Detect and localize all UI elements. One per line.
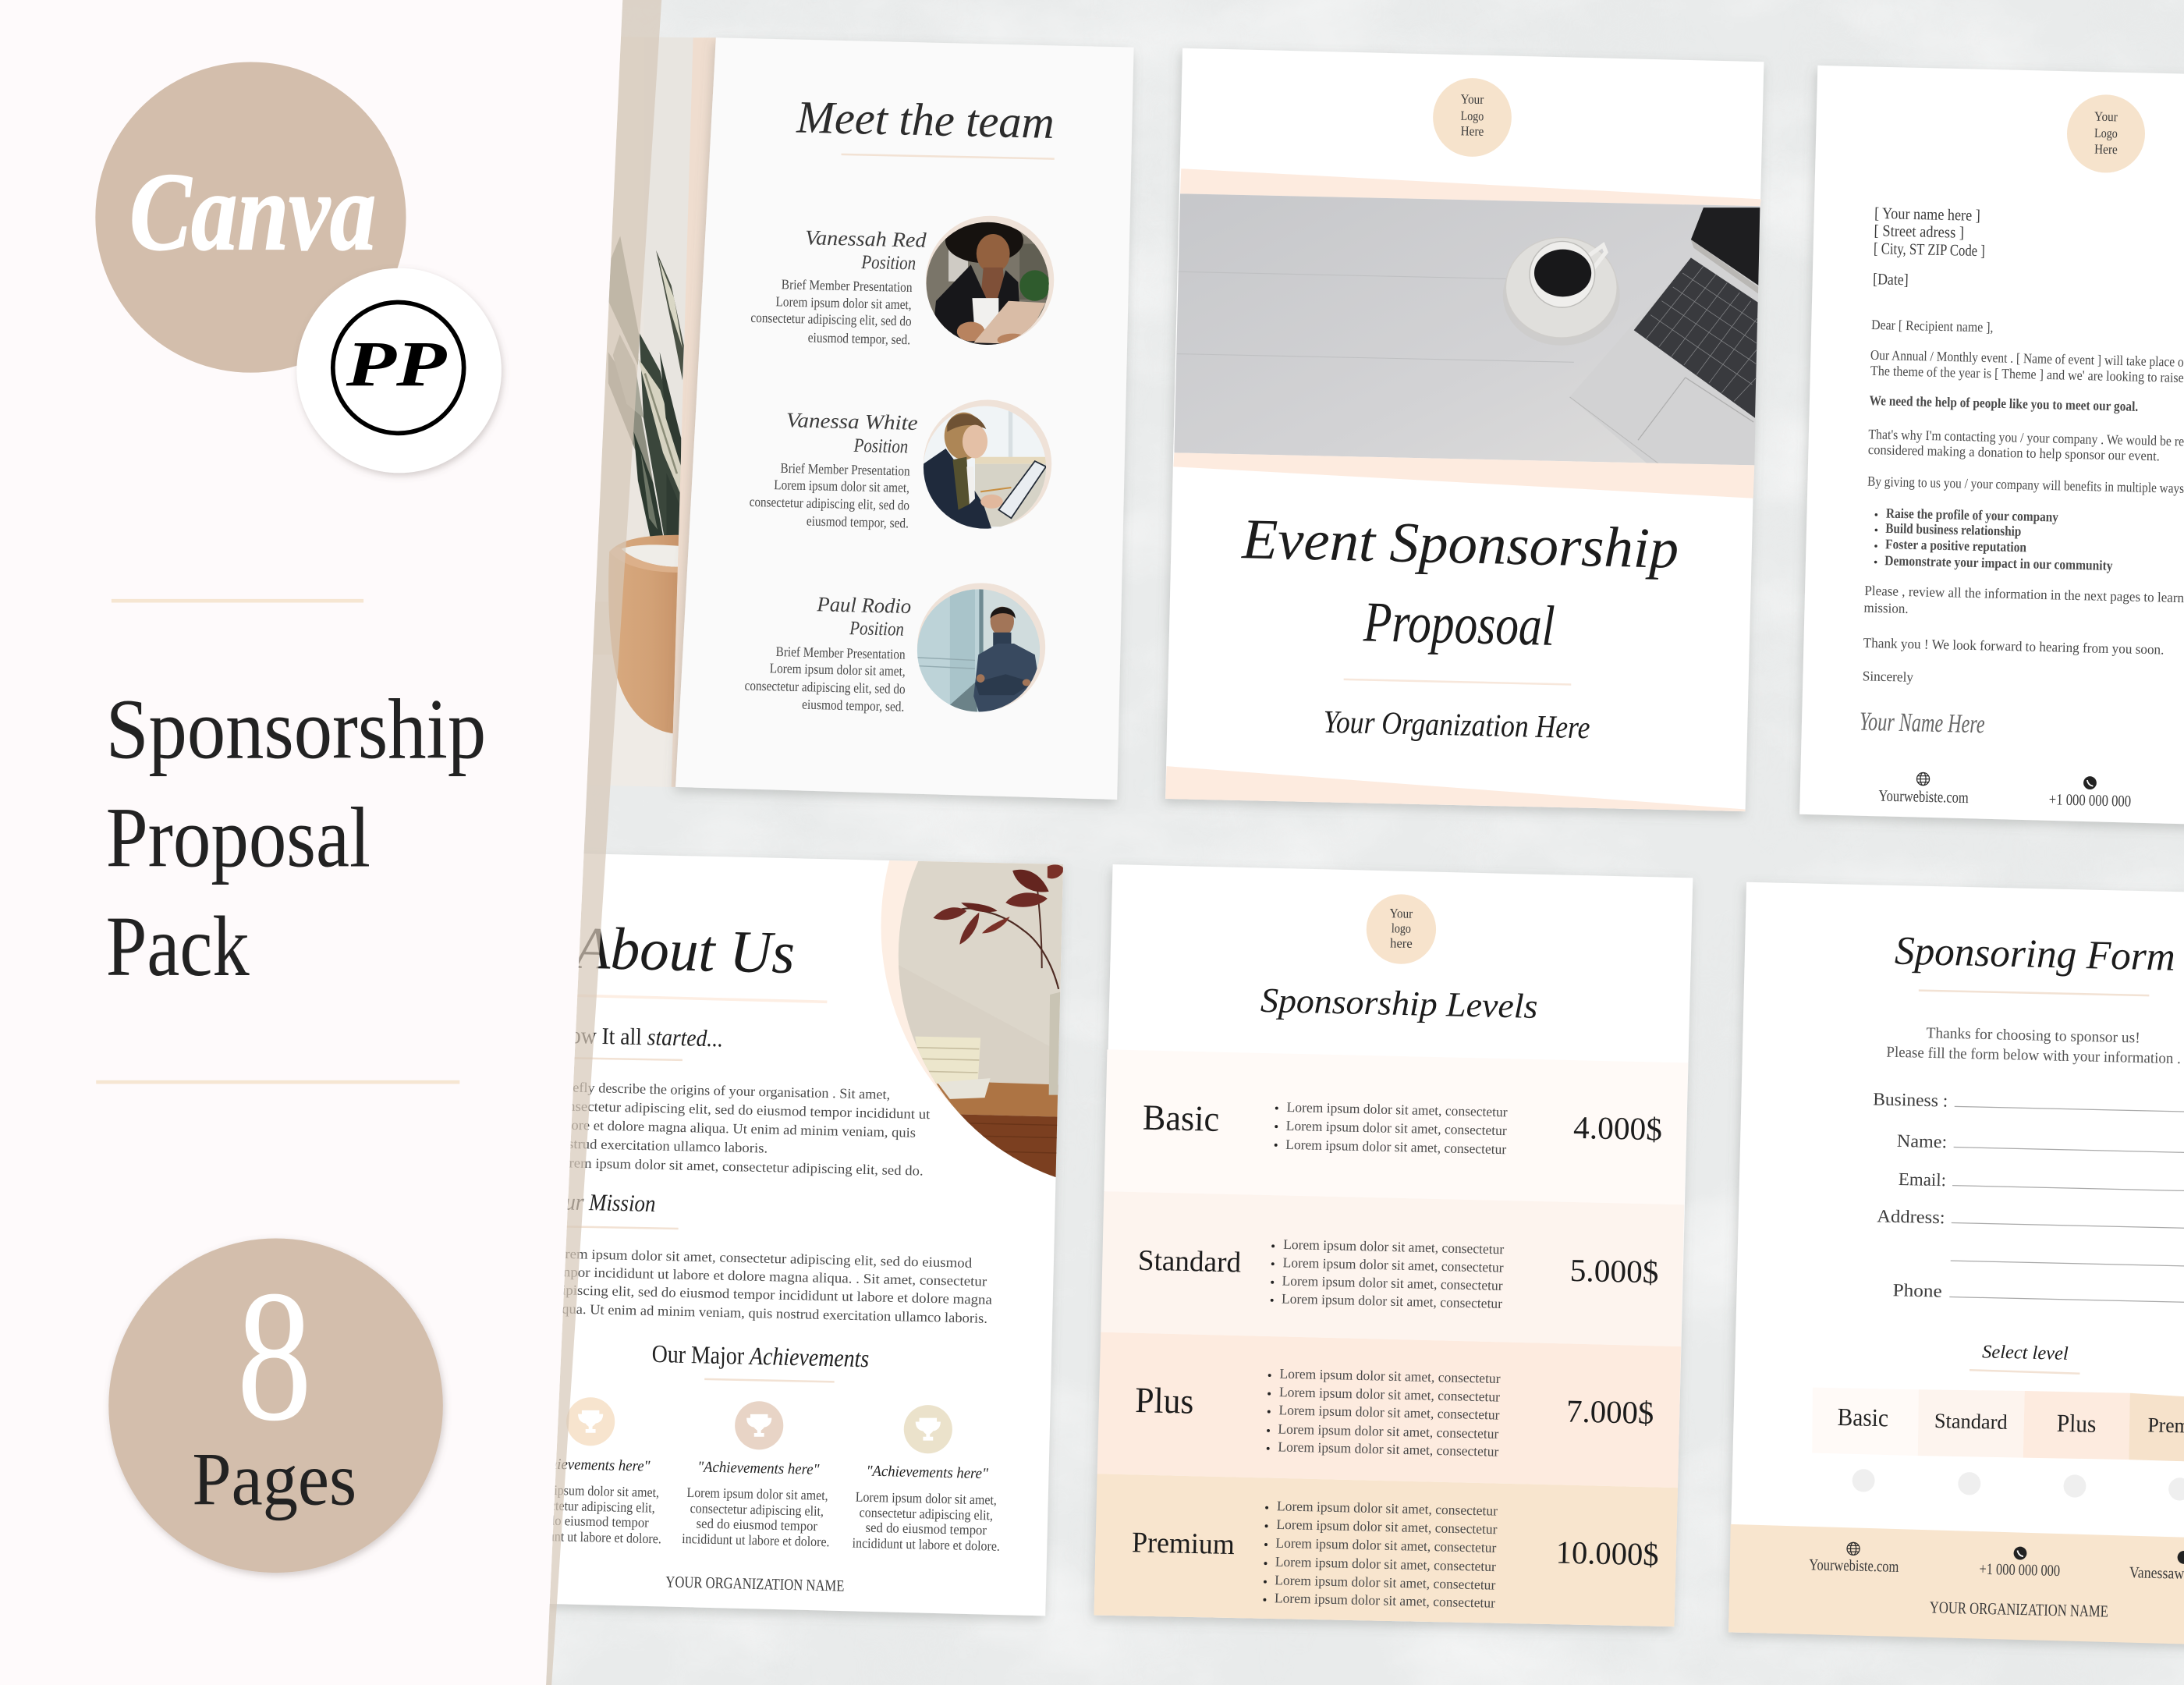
letter body: Thank you ! We look forward to hearing from you soon. — [1863, 635, 2164, 658]
achievement 3 — [852, 1405, 1000, 1554]
logo badge: Here — [1460, 123, 1484, 139]
pages badge: 8 — [237, 1252, 312, 1460]
level: standard: Lorem ipsum dolor sit amet, consectetur — [1283, 1236, 1504, 1257]
level: premium: Lorem ipsum dolor sit amet, consectetur — [1277, 1498, 1498, 1519]
form intro — [1886, 1024, 2181, 1067]
letter body: We need the help of people like you to meet our goal. — [1869, 392, 2138, 414]
page body — [1165, 48, 1764, 811]
achievement 1: Lorem ipsum dolor sit amet, — [518, 1481, 659, 1500]
team member 1: Brief Member Presentation — [782, 276, 913, 295]
level: standard: 5.000$ — [1569, 1252, 1659, 1289]
level: basic: Lorem ipsum dolor sit amet, consectetur — [1286, 1118, 1507, 1138]
main title: Sponsorship — [106, 680, 486, 776]
top peach band — [1180, 168, 1761, 206]
logo badge — [1367, 894, 1436, 964]
footer organization: YOUR ORGANIZATION NAME — [1930, 1598, 2108, 1621]
level: premium: Lorem ipsum dolor sit amet, consectetur — [1275, 1535, 1497, 1556]
team member 3: eiusmod tempor, sed. — [802, 697, 905, 715]
page: cover letter — [1799, 66, 2184, 825]
address block: [Date] — [1873, 271, 1909, 289]
logo badge: Your — [1389, 906, 1413, 921]
section: our mission: adipiscing elit, sed do eiusmod tempor incididunt ut labore et dolore magna — [548, 1282, 992, 1307]
logo badge — [1433, 78, 1512, 157]
section: how it all started — [553, 1022, 931, 1179]
level: standard: Lorem ipsum dolor sit amet, consectetur — [1282, 1254, 1504, 1275]
level: standard: Lorem ipsum dolor sit amet, consectetur — [1282, 1291, 1502, 1311]
middle peach band — [1173, 452, 1754, 498]
achievement 1: "Achievements here" — [528, 1455, 651, 1475]
team member 1 — [750, 216, 1058, 355]
level: basic: 4.000$ — [1573, 1109, 1662, 1147]
page: sponsorship levels — [1094, 864, 1693, 1626]
achievement 1 — [513, 1397, 661, 1546]
cover title: Event Sponsorship — [1241, 507, 1679, 580]
main title: Proposal — [106, 789, 370, 885]
team member 3: Paul Rodio — [816, 592, 912, 618]
option: basic: Basic — [1837, 1403, 1888, 1431]
heading: about us: About Us — [570, 915, 796, 986]
pp logo badge — [296, 268, 502, 473]
form fields: Phone — [1892, 1280, 1942, 1302]
letter body: Foster a positive reputation — [1885, 536, 2026, 555]
team member 2: Brief Member Presentation — [780, 460, 910, 479]
portrait 2 — [924, 399, 1051, 529]
form fields: Address: — [1877, 1206, 1945, 1228]
pages badge: Pages — [192, 1438, 356, 1521]
team member 2: consectetur adipiscing elit, sed do — [750, 494, 909, 513]
page: sponsoring form — [1728, 882, 2184, 1645]
heading: sponsoring form: Sponsoring Form — [1895, 929, 2175, 980]
level: plus — [1097, 1332, 1681, 1488]
heading: sponsorship levels: Sponsorship Levels — [1260, 981, 1538, 1026]
letter body: considered making a donation to help sponsor our event. — [1868, 442, 2160, 463]
logo badge: logo — [1392, 921, 1411, 936]
bottom peach band — [1165, 766, 1746, 811]
level: standard: Standard — [1137, 1245, 1242, 1279]
level: premium: 10.000$ — [1555, 1534, 1659, 1572]
achievement 2: "Achievements here" — [697, 1458, 820, 1478]
main title — [106, 680, 486, 994]
trophy icon 1 — [566, 1397, 615, 1446]
divider bottom — [96, 1080, 459, 1084]
achievement 2: consectetur adipiscing elit, — [690, 1500, 824, 1519]
achievement 2: incididunt ut labore et dolore. — [682, 1531, 830, 1549]
pp logo badge: PP — [345, 329, 447, 400]
logo badge: Logo — [2094, 126, 2118, 141]
contact: phone — [2049, 776, 2131, 811]
level: plus: Plus — [1135, 1381, 1194, 1422]
letter body: Raise the profile of your company — [1886, 506, 2058, 525]
section: how it all started: Briefly describe the origins of your organisation . Sit amet, — [555, 1079, 890, 1102]
level selector: Select level — [1982, 1342, 2069, 1364]
form fields: Email: — [1899, 1169, 1946, 1190]
level: premium: Lorem ipsum dolor sit amet, consectetur — [1275, 1554, 1496, 1574]
letter body: Sincerely — [1863, 668, 1913, 685]
logo badge: Your — [2094, 109, 2118, 124]
letter body: Demonstrate your impact in our community — [1884, 552, 2113, 573]
left panel — [0, 0, 622, 1685]
achievement 3: "Achievements here" — [866, 1463, 989, 1482]
footer band — [1728, 1524, 2184, 1645]
level: standard — [1101, 1191, 1684, 1346]
level: premium: Lorem ipsum dolor sit amet, consectetur — [1275, 1590, 1495, 1611]
level: premium: Lorem ipsum dolor sit amet, consectetur — [1275, 1572, 1496, 1593]
level: basic: Lorem ipsum dolor sit amet, consectetur — [1286, 1099, 1508, 1119]
team member 3: Brief Member Presentation — [775, 644, 906, 662]
option: standard — [1918, 1389, 2025, 1495]
page body — [473, 851, 1063, 1616]
section: how it all started: Lorem ipsum dolor sit amet, consectetur adipiscing elit, sed do. — [553, 1155, 924, 1179]
letter body: mission. — [1863, 600, 1909, 616]
form intro: Thanks for choosing to sponsor us! — [1926, 1024, 2140, 1047]
team member 2: Lorem ipsum dolor sit amet, — [774, 477, 909, 495]
option: premium — [2129, 1393, 2184, 1501]
footer website — [1809, 1542, 1899, 1576]
team member 1: Position — [860, 252, 916, 274]
level: premium: Premium — [1132, 1527, 1235, 1561]
achievement 2: Lorem ipsum dolor sit amet, — [686, 1485, 828, 1503]
address block: [ City, ST ZIP Code ] — [1874, 240, 1985, 260]
section: how it all started: labore et dolore magna aliqua. Ut enim ad minim veniam, quis — [554, 1116, 916, 1140]
achievement 2 — [682, 1401, 830, 1549]
level: premium: Lorem ipsum dolor sit amet, consectetur — [1276, 1516, 1498, 1537]
footer phone — [1979, 1547, 2060, 1580]
logo badge: Here — [2094, 141, 2118, 157]
level: plus: Lorem ipsum dolor sit amet, consectetur — [1278, 1438, 1499, 1460]
team member 3: consectetur adipiscing elit, sed do — [744, 677, 906, 697]
form fields: Name: — [1897, 1131, 1948, 1152]
level: plus: Lorem ipsum dolor sit amet, consectetur — [1278, 1421, 1499, 1442]
organization name: Your Organization Here — [1323, 704, 1590, 745]
pages badge — [108, 1239, 443, 1573]
level: basic — [1104, 1049, 1688, 1204]
main title: Pack — [106, 898, 250, 994]
canva badge: Canva — [129, 150, 376, 273]
corner photo: books and branch — [881, 665, 1403, 1198]
section: our mission: Lorem ipsum dolor sit amet, consectetur adipiscing elit, sed do eiusmod — [548, 1246, 972, 1271]
address block: [ Your name here ] — [1874, 205, 1980, 225]
team member 1: Vanessah Red — [805, 225, 927, 252]
achievement 1: sed do eiusmod tempor — [527, 1512, 649, 1531]
page body — [1799, 66, 2184, 825]
section: how it all started: How It all started... — [555, 1022, 724, 1052]
team member 1: Lorem ipsum dolor sit amet, — [775, 293, 912, 312]
heading: meet the team: Meet the team — [796, 90, 1055, 148]
level: plus: 7.000$ — [1566, 1392, 1654, 1431]
trophy icon 2 — [735, 1401, 783, 1449]
section: our mission: aliqua. Ut enim ad minim veniam, quis nostrud exercitation ullamco laboris. — [548, 1300, 987, 1326]
plant photo — [594, 37, 693, 749]
team member 2: Position — [853, 435, 909, 457]
portrait 1 — [926, 215, 1055, 345]
address block — [1873, 205, 1985, 289]
peach stripe — [672, 37, 716, 787]
team member 3: Lorem ipsum dolor sit amet, — [770, 660, 906, 679]
logo badge: Your — [1460, 91, 1484, 107]
achievement 3: Lorem ipsum dolor sit amet, — [855, 1489, 997, 1508]
letter body: Dear [ Recipient name ], — [1871, 317, 1994, 335]
team member 3 — [744, 583, 1051, 725]
address block: [ Street adress ] — [1874, 222, 1964, 242]
page body — [1728, 882, 2184, 1644]
section: our mission — [548, 1188, 992, 1326]
form fields: Business : — [1873, 1089, 1948, 1112]
page: about us — [473, 665, 1403, 1616]
footer phone: +1 000 000 000 — [1979, 1561, 2060, 1580]
form intro: Please fill the form below with your information . — [1886, 1044, 2181, 1067]
page body — [675, 37, 1134, 800]
contact: website: Yourwebiste.com — [1878, 788, 1969, 807]
canva badge — [95, 62, 406, 373]
team member 3: Position — [849, 618, 904, 640]
portrait 3 — [913, 583, 1051, 725]
logo badge: Logo — [1460, 108, 1484, 123]
organization footer: YOUR ORGANIZATION NAME — [665, 1573, 845, 1595]
team member 1: consectetur adipiscing elit, sed do — [750, 310, 912, 329]
section: our mission: Our Mission — [549, 1188, 656, 1217]
level: plus: Lorem ipsum dolor sit amet, consectetur — [1279, 1366, 1501, 1386]
team member 2 — [750, 399, 1058, 541]
option: basic — [1812, 1388, 1919, 1492]
option: plus — [2023, 1391, 2130, 1498]
level: basic: Basic — [1142, 1098, 1220, 1140]
page body — [1094, 864, 1693, 1626]
page: cover event sponsorship proposal — [1165, 48, 1769, 811]
cover title — [1241, 507, 1679, 658]
level: standard: Lorem ipsum dolor sit amet, consectetur — [1282, 1273, 1503, 1293]
contact: website — [1878, 773, 1969, 807]
achievement 3: incididunt ut labore et dolore. — [852, 1535, 1000, 1554]
achievement 1: consectetur adipiscing elit, — [521, 1497, 655, 1516]
level: basic: Lorem ipsum dolor sit amet, consectetur — [1285, 1137, 1507, 1157]
footer website: Yourwebiste.com — [1809, 1556, 1899, 1576]
contact: phone: +1 000 000 000 — [2049, 791, 2131, 811]
page: meet the team — [557, 28, 1134, 800]
achievement 2: sed do eiusmod tempor — [696, 1516, 817, 1534]
translucent divider strip — [546, 0, 661, 1685]
level: plus: Lorem ipsum dolor sit amet, consectetur — [1278, 1402, 1500, 1423]
footer email — [2129, 1551, 2184, 1583]
divider top — [112, 599, 363, 602]
section: our mission: tempor incididunt ut labore et dolore magna aliqua. . Sit amet, consectetur — [548, 1264, 987, 1289]
level selector — [1812, 1342, 2184, 1501]
team member 2: eiusmod tempor, sed. — [807, 513, 909, 530]
trophy icon 3 — [904, 1405, 952, 1453]
achievement 3: sed do eiusmod tempor — [865, 1520, 987, 1538]
achievement 1: incididunt ut labore et dolore. — [513, 1527, 661, 1546]
team member 2: Vanessa White — [786, 408, 918, 435]
level: premium — [1094, 1474, 1678, 1626]
letter body — [1863, 317, 2184, 685]
section: how it all started: consectetur adipiscing elit, sed do eiusmod tempor incididunt ut — [554, 1098, 931, 1122]
form fields — [1873, 1089, 2184, 1302]
logo badge — [2067, 94, 2145, 172]
cover title: Proposoal — [1362, 590, 1555, 658]
desk photo: coffee and laptop — [1170, 188, 1769, 474]
level: plus: Lorem ipsum dolor sit amet, consectetur — [1279, 1384, 1500, 1405]
team member 1: eiusmod tempor, sed. — [808, 329, 910, 347]
section: how it all started: nostrud exercitation ullamco laboris. — [553, 1135, 768, 1156]
option: plus: Plus — [2056, 1409, 2097, 1438]
letter body: Build business relationship — [1885, 520, 2022, 539]
section: achievements heading: Our Major Achievements — [651, 1339, 870, 1372]
logo badge: here — [1390, 935, 1413, 951]
achievement 3: consectetur adipiscing elit, — [859, 1504, 993, 1523]
option: standard: Standard — [1934, 1409, 2008, 1434]
signature: Your Name Here — [1860, 708, 1985, 739]
